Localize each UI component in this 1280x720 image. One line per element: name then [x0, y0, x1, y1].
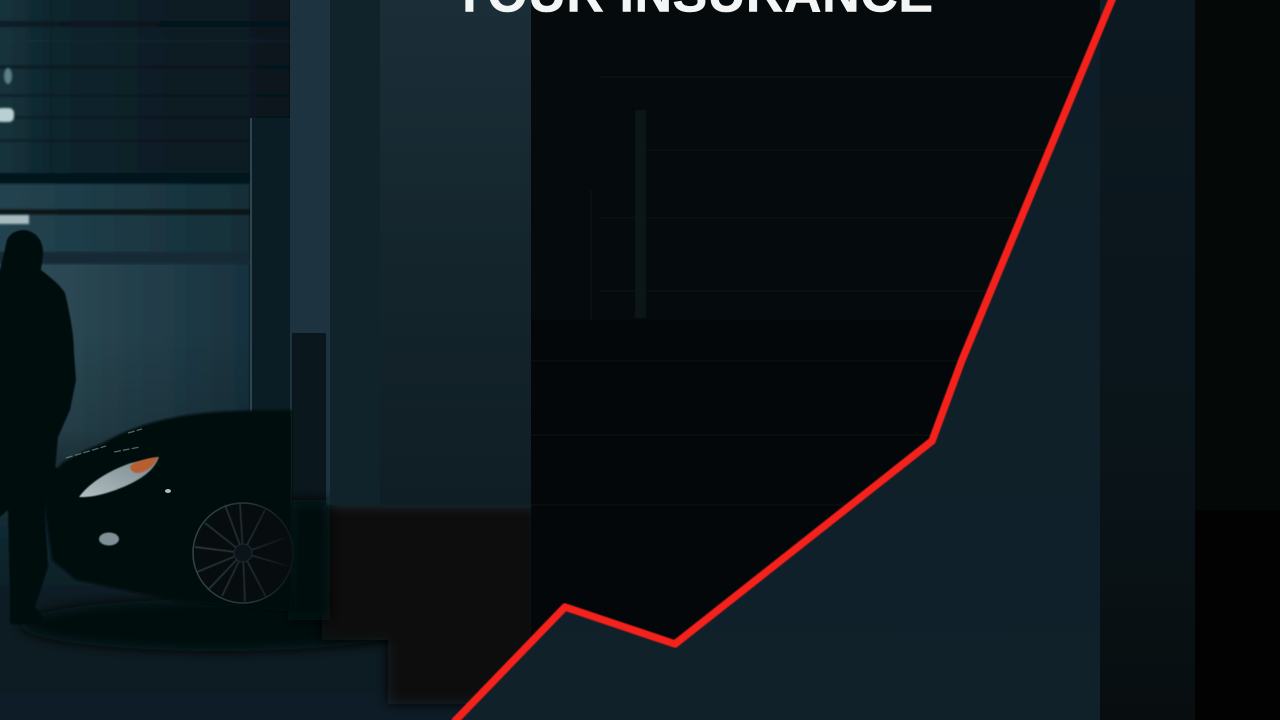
- warm dark base of pillars: [322, 505, 540, 704]
- gridlines: [531, 77, 1100, 505]
- car body: [45, 410, 292, 612]
- ceiling lights: [0, 68, 29, 224]
- icon: wheel: [193, 503, 293, 603]
- back wall: [0, 258, 250, 468]
- panel: dark chart backdrop: [531, 0, 1100, 720]
- floor: [0, 500, 550, 720]
- floor shadow under car: [20, 599, 420, 651]
- pillar stripes: [290, 0, 330, 505]
- silhouette: person standing: [0, 230, 76, 625]
- hood highlights: [66, 429, 142, 458]
- ceiling with horizontal beams: [0, 0, 290, 255]
- icon: amber indicator: [130, 457, 158, 473]
- icon: fog light: [99, 532, 119, 546]
- area chart: fill under line: [454, 0, 1116, 720]
- car: [45, 410, 293, 612]
- line chart: rising red trend line: [454, 0, 1116, 720]
- side wall strip: [250, 118, 252, 518]
- panel: background photo of parking garage: [0, 0, 550, 720]
- icon: headlight: [79, 457, 159, 497]
- panel: right-hand columns: [1100, 0, 1280, 720]
